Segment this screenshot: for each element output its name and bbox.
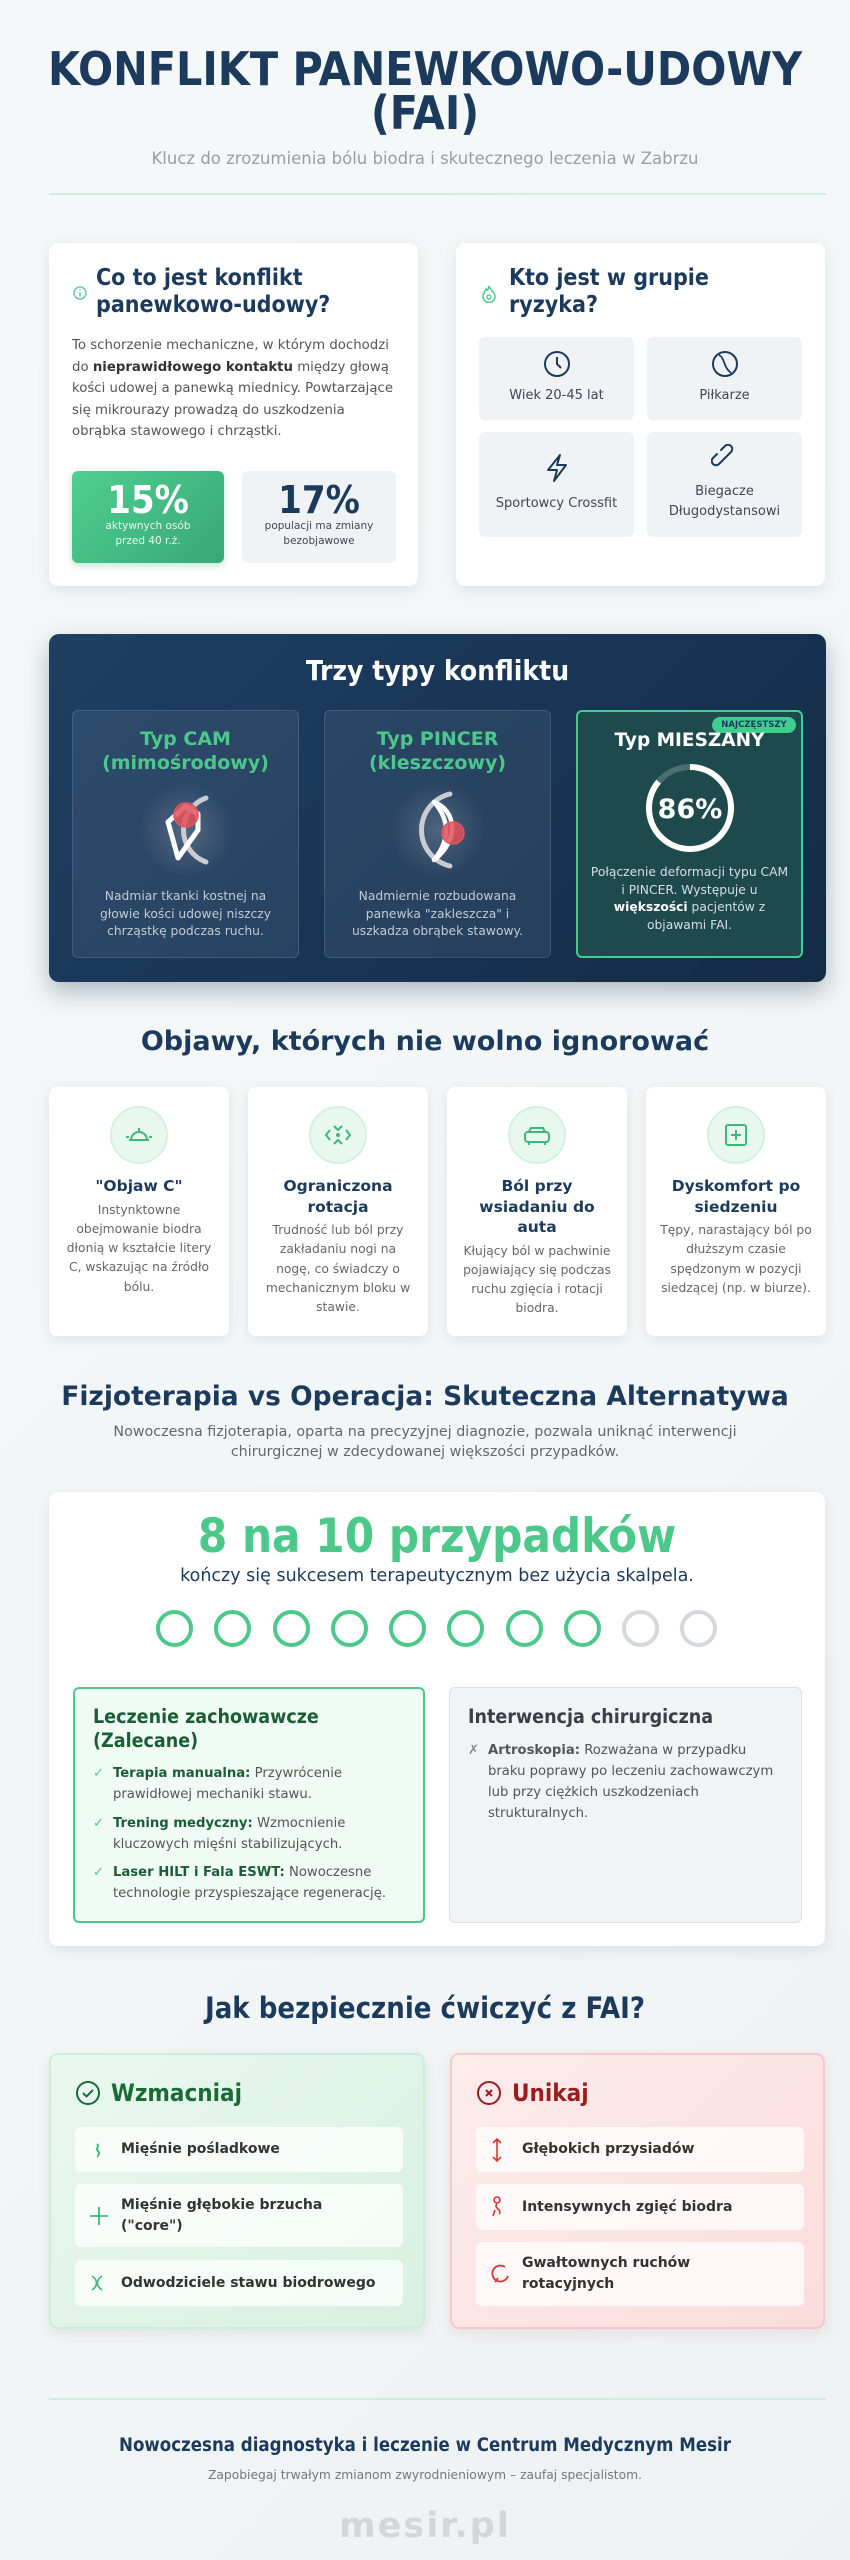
heading: symptoms: Objawy, których nie wolno ignorować — [141, 1026, 709, 1057]
footer heading: Nowoczesna diagnostyka i leczenie w Centrum Medycznym Mesir — [119, 2435, 731, 2456]
card: rotation: rotacja — [307, 1198, 369, 1216]
card: CAM: Nadmiar tkanki kostnej na głowie kości udowej niszczy chrząstkę podczas ruchu. — [100, 889, 271, 938]
title: (FAI) — [371, 86, 479, 140]
box: conservative: (Zalecane) — [93, 1729, 198, 1752]
badge — [712, 717, 796, 733]
heading — [477, 2079, 589, 2107]
card: car: wsiadaniu do — [479, 1198, 595, 1216]
item: abductors: Odwodziciele stawu biodrowego — [121, 2274, 376, 2290]
panel: what is FAI — [49, 243, 418, 586]
heading: Kto jest w grupie — [509, 265, 709, 291]
card: rotation: Trudność lub ból przy zakładaniu nogi na nogę, co świadczy o mechanicznym bloku w stawie. — [266, 1223, 410, 1314]
badge: NAJCZĘSTSZY — [721, 720, 787, 730]
card: objaw C: "Objaw C" — [95, 1177, 183, 1195]
item: abductors — [75, 2260, 403, 2306]
box: conservative: Laser HILT i Fala ESWT: Nowoczesne technologie przyspieszające regenerację. — [113, 1865, 386, 1901]
box: conservative — [73, 1687, 425, 1923]
title: KONFLIKT PANEWKOWO-UDOWY — [48, 42, 802, 96]
card: objaw C — [49, 1087, 229, 1336]
box: conservative: ✓ — [93, 1865, 104, 1880]
box: conservative: Trening medyczny: Wzmocnienie kluczowych mięśni stabilizujących. — [113, 1816, 345, 1852]
stat: 17%: 17% — [278, 478, 360, 522]
card: mixed: Połączenie deformacji typu CAM i PINCER. Występuje u większości pacjentów z objawami FAI. — [591, 865, 788, 932]
heading — [96, 265, 330, 318]
footer text: Zapobiegaj trwałym zmianom zwyrodnieniowym – zaufaj specjalistom. — [208, 2468, 642, 2482]
panel: risk group — [456, 243, 825, 586]
logo text: mesir.pl — [339, 2506, 511, 2546]
heading: exercise: Jak bezpiecznie ćwiczyć z FAI? — [205, 1991, 645, 2025]
item: core: Mięśnie głębokie brzucha ("core") — [121, 2196, 322, 2234]
card: mixed: Typ MIESZANY — [614, 730, 765, 751]
box: surgery: ✗ — [468, 1743, 479, 1758]
heading: physio vs surgery: Fizjoterapia vs Operacja: Skuteczna Alternatywa — [61, 1381, 789, 1412]
stat: 15%: aktywnych osób — [105, 520, 191, 532]
item: hip flexion: Intensywnych zgięć biodra — [522, 2198, 732, 2214]
heading: Co to jest konflikt — [96, 265, 303, 291]
card: mixed — [576, 710, 803, 958]
box: surgery: Artroskopia: Rozważana w przypadku braku poprawy po leczeniu zachowawczym lub przy ciężkich uszkodzeniach strukturalnych. — [488, 1743, 773, 1821]
stat: 17%: bezobjawowe — [283, 535, 355, 547]
title — [48, 42, 802, 140]
card: PINCER: Nadmiernie rozbudowana panewka "zakleszcza" i uszkadza obrąbek stawowy. — [352, 889, 523, 938]
stat: 17%: populacji ma zmiany — [265, 520, 373, 532]
icon: info — [73, 286, 87, 300]
chart: 10 circles — [156, 1610, 717, 1647]
subtitle: Klucz do zrozumienia bólu biodra i skutecznego leczenia w Zabrzu — [151, 149, 699, 168]
icon: cam joint — [148, 792, 224, 868]
tile: age — [479, 337, 634, 420]
card: car — [447, 1087, 627, 1336]
item: rotations — [476, 2242, 804, 2306]
chart: ring 86% — [646, 764, 734, 852]
card: CAM: (mimośrodowy) — [102, 752, 269, 774]
item: squats — [476, 2127, 804, 2172]
big stat: 8 na 10 przypadków — [198, 1509, 676, 1564]
heading: Trzy typy konfliktu — [306, 654, 569, 687]
heading: Unikaj — [512, 2079, 589, 2107]
tile: footballers — [647, 337, 802, 420]
icon: pincer joint — [400, 792, 476, 868]
card: car: auta — [517, 1218, 557, 1236]
item: squats: Głębokich przysiadów — [522, 2141, 694, 2157]
text block: To schorzenie mechaniczne, w którym dochodzi do nieprawidłowego kontaktu między głową kości udowej a panewką miednicy. Powtarzające się mikrourazy prowadzą do uszkodzenia obrąbka stawowego i chrząstki. — [72, 338, 393, 439]
item: glutes: Mięśnie pośladkowe — [121, 2141, 280, 2157]
item: glutes — [75, 2127, 403, 2172]
stat: 15%: przed 40 r.ż. — [115, 535, 181, 547]
tile: crossfit: Sportowcy Crossfit — [496, 496, 617, 511]
stat: 17% — [242, 471, 396, 563]
card: rotation: Ograniczona — [283, 1177, 393, 1195]
chart: ring 86%: 86% — [658, 794, 722, 825]
stat: 15% — [72, 471, 224, 563]
heading — [509, 265, 709, 318]
card: rotation — [248, 1087, 428, 1336]
card: car: Ból przy — [501, 1177, 573, 1195]
box: conservative: Leczenie zachowawcze — [93, 1705, 319, 1728]
panel: three types — [49, 634, 826, 982]
box: conservative: ✓ — [93, 1766, 104, 1781]
card: sitting: Tępy, narastający ból po dłuższym czasie spędzonym w pozycji siedzącej (np. w biurze). — [660, 1223, 812, 1295]
tile: runners: Biegacze — [695, 484, 754, 499]
tile: runners: Długodystansowi — [669, 504, 780, 519]
panel: avoid — [450, 2053, 825, 2329]
item: rotations: Gwałtownych ruchów rotacyjnych — [522, 2255, 690, 2292]
heading: Wzmacniaj — [111, 2079, 242, 2107]
box: surgery: Interwencja chirurgiczna — [468, 1705, 713, 1728]
heading: ryzyka? — [509, 292, 598, 318]
card: sitting: siedzeniu — [694, 1198, 778, 1216]
item: hip flexion — [476, 2184, 804, 2230]
tile: age: Wiek 20-45 lat — [509, 388, 604, 403]
card: PINCER: (kleszczowy) — [369, 752, 506, 774]
heading: panewkowo-udowy? — [96, 292, 330, 318]
card: CAM — [72, 710, 299, 958]
box: conservative: ✓ — [93, 1816, 104, 1831]
text: intro: Nowoczesna fizjoterapia, oparta na precyzyjnej diagnozie, pozwala uniknąć interwencji chirurgicznej w zdecydowanej większości przypadków. — [113, 1424, 737, 1460]
tile: footballers: Piłkarze — [699, 388, 750, 403]
box: surgery — [449, 1687, 802, 1923]
card: sitting — [646, 1087, 826, 1336]
panel: strengthen — [49, 2053, 425, 2329]
icon: flame — [482, 286, 496, 303]
item: core — [75, 2184, 403, 2247]
stat: 15%: 15% — [107, 478, 189, 522]
tile: crossfit — [479, 432, 634, 537]
box: conservative: Terapia manualna: Przywrócenie prawidłowej mechaniki stawu. — [113, 1766, 342, 1802]
card: objaw C: Instynktowne obejmowanie biodra dłonią w kształcie litery C, wskazując na źródło bólu. — [67, 1202, 211, 1294]
card: PINCER — [324, 710, 551, 958]
card: car: Kłujący ból w pachwinie pojawiający się podczas ruchu zgięcia i rotacji biodra. — [463, 1244, 611, 1315]
tile: runners — [647, 432, 802, 537]
card: PINCER: Typ PINCER — [377, 728, 498, 750]
panel: 8 of 10: kończy się sukcesem terapeutycznym bez użycia skalpela. — [180, 1566, 694, 1586]
card: sitting: Dyskomfort po — [672, 1177, 800, 1195]
card: CAM: Typ CAM — [140, 728, 231, 750]
panel: 8 of 10 — [49, 1492, 825, 1946]
